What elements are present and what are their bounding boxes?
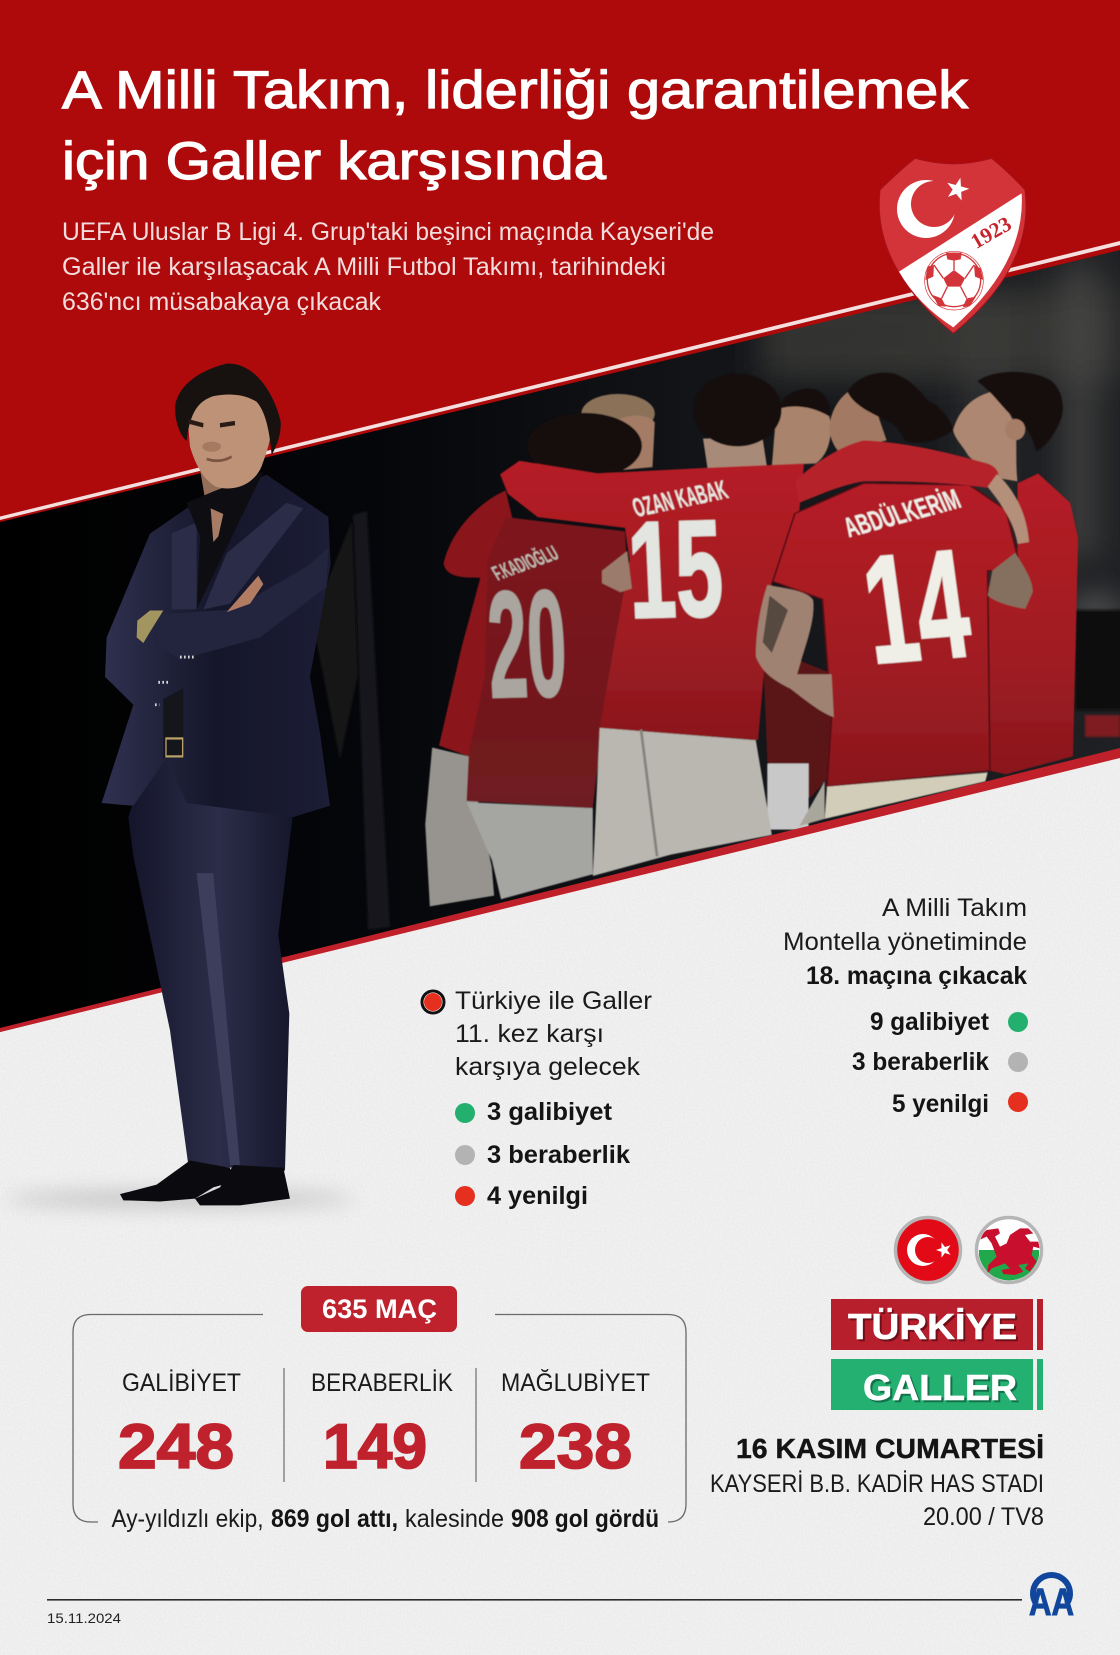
subtitle: Galler ile karşılaşacak A Milli Futbol Takımı, tarihindeki [62,253,666,281]
photo background [0,200,1120,1060]
panel: all-time record [73,1286,686,1533]
player number 15: 15 [625,491,726,647]
icon: Turkish flag [896,1218,960,1282]
losses stat [501,1368,650,1482]
Montella intro: A Milli Takım [882,894,1027,922]
team bar: Türkiye: TÜRKİYE [848,1306,1017,1347]
far-left player [425,490,515,906]
Montella intro: Montella yönetiminde [783,928,1027,956]
head to head intro [455,987,652,1081]
draws stat: 149 [323,1412,427,1482]
arm over shoulders [795,440,1029,544]
subtitle: UEFA Uluslar B Ligi 4. Grup'taki beşinci maçında Kayseri'de [62,218,714,246]
goals note: 908 gol gördü [511,1505,659,1533]
right player [953,372,1078,774]
team bar: Türkiye: TÜRKİYE [850,1308,1019,1349]
wins stat [118,1368,241,1482]
team bar: Galler: GALLER [863,1367,1017,1408]
panel: Montella record [783,894,1028,1118]
wins row: 9 galibiyet [870,1008,990,1036]
lower diagonal red stripe [0,748,1120,1032]
trousers [128,733,293,1171]
belt buckle [166,738,183,756]
jacket [102,475,331,817]
badge: 635 matches: 635 MAÇ [322,1294,437,1324]
bullet icon [422,991,444,1013]
player number 20 [467,394,655,899]
icon: federation crest: 1923 [966,212,1015,254]
black shirt [187,472,263,609]
goals note: kalesinde [405,1505,504,1533]
middle dark player [763,646,834,830]
head [175,364,281,488]
photo: team celebrating [0,200,1120,1060]
goals note [112,1505,659,1533]
hand [227,576,263,612]
Montella intro: 18. maçına çıkacak [806,962,1027,990]
badge: 635 matches [301,1286,457,1332]
title: için Galler karşısında [62,132,607,191]
subtitle: 636'ncı müsabakaya çıkacak [62,288,381,316]
player number 20: 20 [484,559,570,730]
header diagonal white stripe [0,241,1120,520]
Montella intro [783,894,1027,990]
coach figure [102,364,331,1205]
player number 14: ABDÜLKERİM [838,483,965,543]
jacket buttons [155,657,195,705]
draws stat [311,1368,453,1482]
head to head intro: 11. kez karşı [455,1020,604,1048]
match details: KAYSERİ B.B. KADİR HAS STADI [710,1469,1044,1498]
player number 15: OZAN KABAK [629,475,732,523]
match details: 16 KASIM CUMARTESİ [736,1433,1044,1464]
wins stat: 248 [118,1412,234,1482]
icon: AA logo: AA [1029,1582,1074,1624]
head to head intro: karşıya gelecek [455,1053,641,1081]
goals note: Ay-yıldızlı ekip, [112,1505,264,1533]
player with ponytail [829,373,953,454]
crossed forearm [152,548,328,660]
losses stat: 238 [519,1412,632,1482]
team bar: Türkiye [831,1299,1043,1350]
panel: head to head [422,987,652,1210]
team bar: Galler: GALLER [865,1369,1019,1410]
player number 15 [500,374,804,876]
icon: federation crest [879,158,1026,333]
match details: 20.00 / TV8 [923,1503,1044,1531]
losses stat: MAĞLUBİYET [501,1368,650,1397]
title: A Milli Takım, liderliği garantilemek [62,61,969,120]
goals note: 869 gol attı, [271,1505,398,1533]
match details [710,1433,1044,1531]
losses row: 5 yenilgi [892,1090,989,1118]
player number 14: 14 [854,518,979,696]
red header background [0,0,1120,522]
draws stat: BERABERLİK [311,1368,453,1397]
neck [200,469,253,525]
watch [137,610,163,643]
losses row: 4 yenilgi [487,1182,588,1210]
draws row: 3 beraberlik [487,1141,630,1169]
wins stat: GALİBİYET [122,1368,241,1397]
wins row: 3 galibiyet [487,1098,613,1126]
icon: Welsh flag [976,1218,1042,1282]
footer rule [47,1599,1022,1601]
player number 20: F.KADIOĞLU [487,541,563,585]
draws row: 3 beraberlik [852,1048,989,1076]
team bar: Galler [831,1359,1043,1410]
coach shadow [5,1192,355,1206]
player number 14 [756,483,1033,819]
subtitle [62,218,714,316]
date: 15.11.2024 [47,1610,121,1626]
shoes [120,1160,290,1205]
centre smiling player [772,389,831,465]
title [62,61,969,191]
panel outline [73,1314,686,1522]
head to head intro: Türkiye ile Galler [455,987,652,1015]
lapel highlight [172,503,303,609]
players group [425,372,1078,906]
